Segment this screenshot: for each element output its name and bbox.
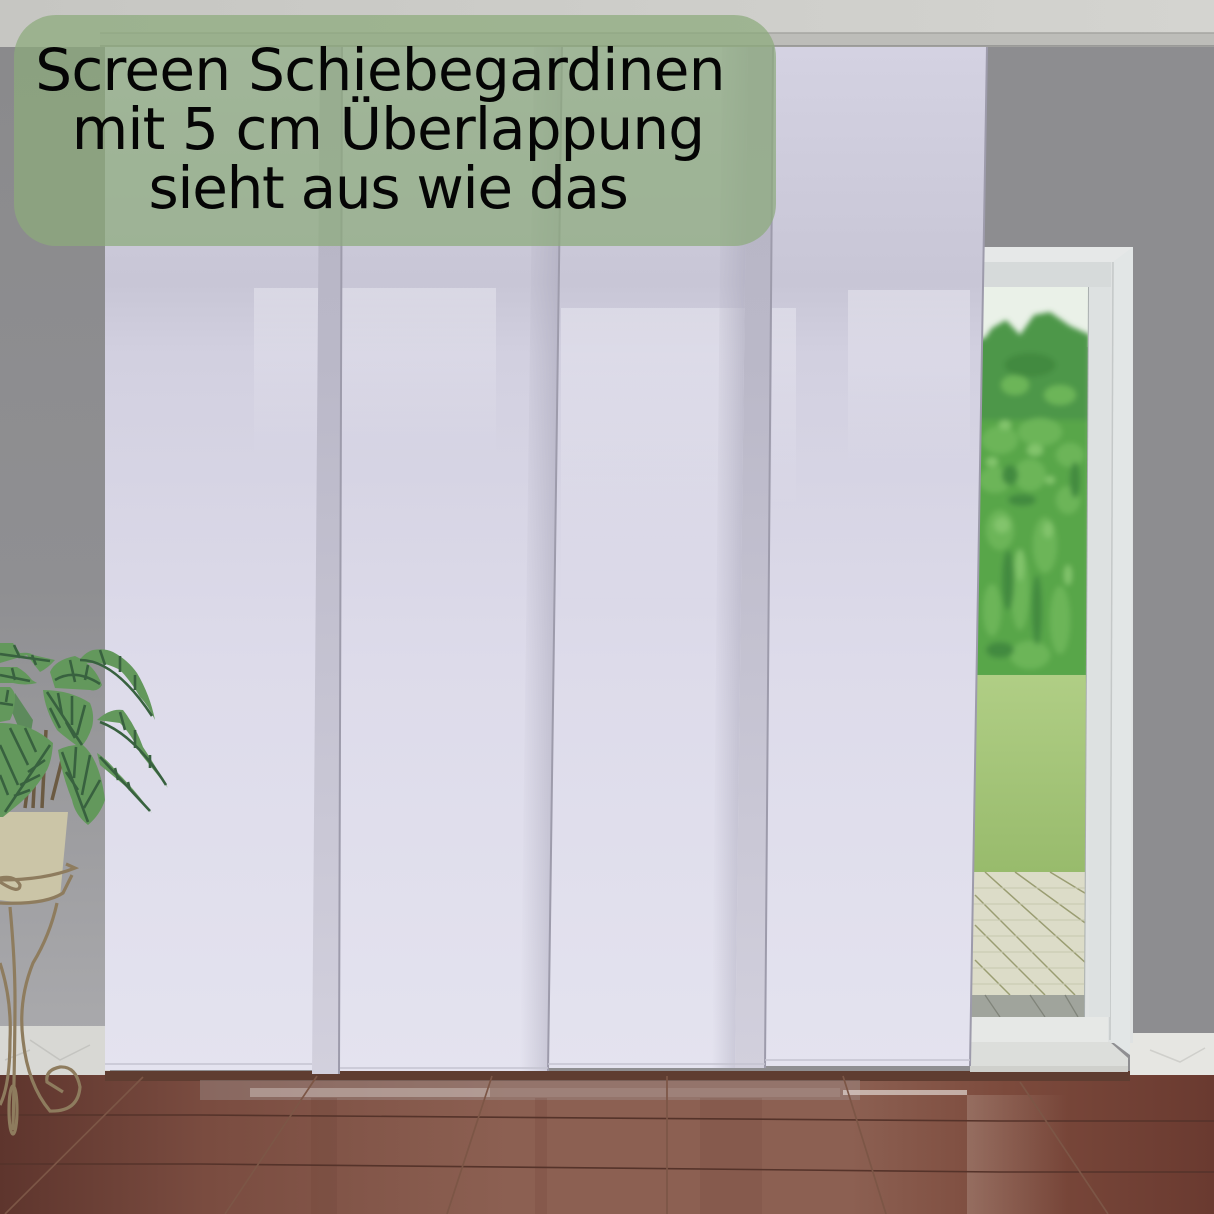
potted plant [0,643,168,902]
title line 3: sieht aus wie das [148,154,628,222]
title line 1: Screen Schiebegardinen [35,36,725,104]
right wall [980,47,1214,1037]
daylight patches on the fabric [254,288,970,608]
plant stand [0,864,80,1134]
tiled floor [0,1071,1214,1214]
title line 2: mit 5 cm Überlappung [72,95,704,163]
skirting boards [0,1026,1214,1083]
window sill [970,1042,1128,1072]
curtain panels [105,47,987,1074]
window frame [970,247,1133,1055]
overlap bands between panels [312,47,773,1074]
panel seams [339,47,987,1074]
bottom hems [105,1060,970,1068]
ceiling with curtain rail [0,0,1214,47]
title banner [14,15,776,246]
garden view through window [972,287,1088,1017]
left wall [0,47,110,1032]
